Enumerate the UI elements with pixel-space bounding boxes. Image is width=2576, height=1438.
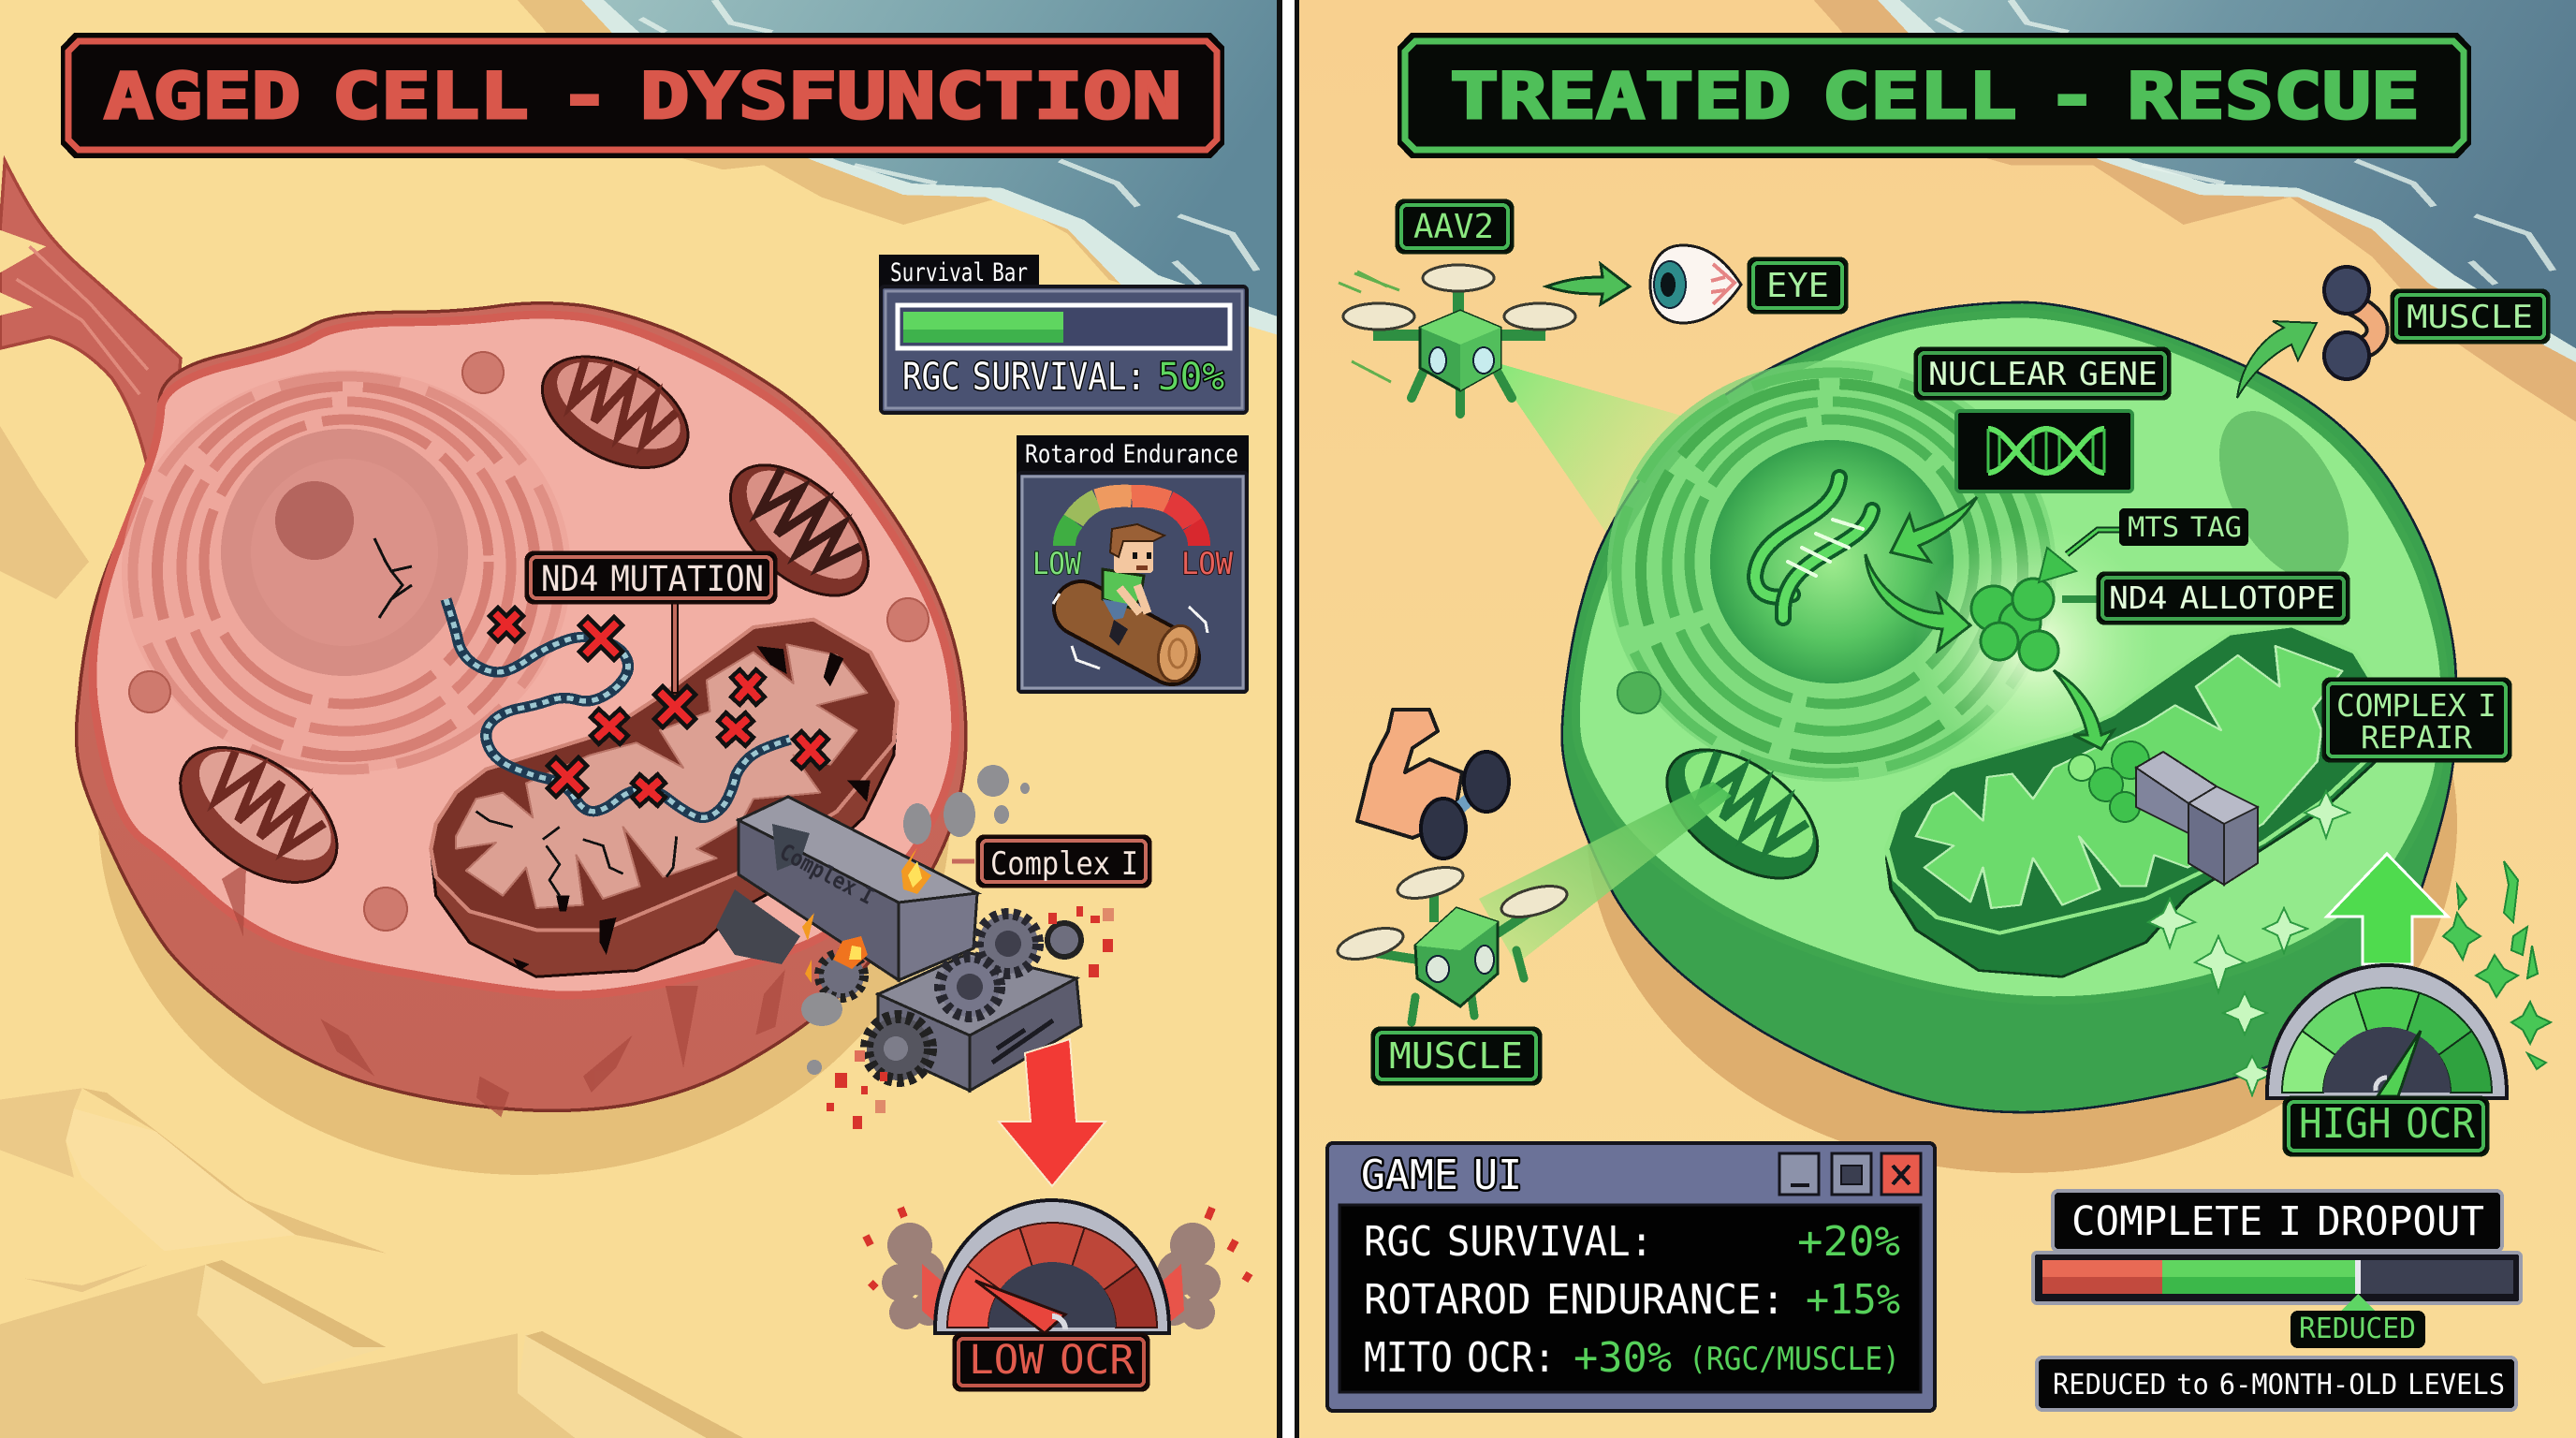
label: Complex I repair: COMPLEX I [2336, 687, 2496, 724]
arrow: drone to eye [1546, 264, 1630, 304]
cell body right [1562, 302, 2456, 1112]
sand shading upper left [0, 426, 89, 599]
panel: aged cell dysfunction [0, 0, 1278, 1438]
sea and shoreline right [1814, 0, 2576, 422]
panel: rotarod endurance [1017, 435, 1249, 692]
endoplasmic reticulum right [1607, 360, 2056, 782]
nucleus left [221, 429, 468, 676]
red X markers [498, 616, 820, 798]
panel: game UI: (RGC/MUSCLE) [1689, 1341, 1900, 1378]
gears [819, 914, 1081, 1080]
lower block [878, 953, 1076, 1035]
sparkles [2148, 791, 2349, 1095]
label: low OCR: LOW OCR [969, 1337, 1134, 1384]
DNA helix in nucleus [1755, 477, 1872, 618]
endurance arc gauge [1064, 496, 1199, 546]
label: AAV2: AAV2 [1413, 208, 1494, 246]
label: muscle upper [2392, 290, 2549, 343]
side wall blemishes [222, 862, 785, 1117]
mitochondrion lower left [156, 720, 361, 910]
panel: survival bar: Survival Bar [890, 258, 1028, 287]
panel: complete I dropout: COMPLETE I DROPOUT [2071, 1198, 2484, 1245]
glow ellipse cytoplasm [2192, 389, 2376, 603]
label: muscle lower: MUSCLE [1389, 1035, 1523, 1077]
panel: game UI [1327, 1143, 1935, 1411]
small mitochondria left [156, 334, 892, 910]
cell side wall right [1562, 302, 2456, 1112]
icon: DNA box [1956, 411, 2132, 492]
label: MTS tag: MTS TAG [2128, 511, 2242, 543]
label: ND4 mutation: ND4 MUTATION [541, 559, 764, 599]
arrow: protein to mitochondrion [2054, 670, 2114, 749]
panel: game UI: +30% [1573, 1334, 1672, 1382]
label: high OCR: HIGH OCR [2299, 1100, 2475, 1148]
panel: game UI: +20% [1797, 1218, 1900, 1266]
smoke behind gauge [866, 1208, 1250, 1329]
label: AAV2 [1397, 200, 1513, 253]
MTS tag triangle [2039, 548, 2076, 582]
title: treated cell: TREATED CELL - RESCUE [1450, 60, 2420, 134]
mitochondria cracks [513, 646, 871, 971]
arrow: down to low OCR [999, 1039, 1105, 1186]
nucleus right [1710, 440, 1954, 683]
protein glow [1914, 524, 2158, 768]
arrow: up to mitochondrion from gauge [2327, 854, 2448, 964]
gauge: high OCR [2267, 965, 2507, 1098]
endoplasmic reticulum left [122, 370, 571, 772]
panel: game UI: +15% [1806, 1276, 1900, 1324]
mitochondrion right [707, 440, 892, 620]
divider lines [1277, 0, 1299, 1438]
cell top surface [93, 315, 956, 995]
vesicle right [1617, 672, 1661, 713]
label: nuclear gene [1915, 348, 2170, 399]
label: ND4 allotope: ND4 ALLOTOPE [2109, 580, 2335, 616]
panel: complete I dropout: REDUCED [2299, 1313, 2416, 1345]
lower drone [1335, 861, 1570, 1022]
panel: game UI: ROTAROD ENDURANCE: [1364, 1276, 1785, 1324]
label: ND4 allotope [2062, 573, 2349, 624]
cell shadow [98, 454, 950, 1175]
arrow: nucleus to protein [1866, 554, 1970, 651]
window buttons [1779, 1153, 1921, 1195]
upper drone AAV2 [1339, 265, 1575, 414]
icon: dumbbell arm [2324, 267, 2378, 379]
label: eye [1749, 258, 1847, 313]
needle [975, 1281, 1065, 1333]
leader line [672, 599, 678, 693]
repaired Complex I block [2136, 752, 2258, 885]
title: treated cell [1398, 33, 2471, 158]
panel: complete I dropout: REDUCED to 6-MONTH-OLD LEVELS [2053, 1369, 2505, 1401]
label: Complex I: Complex I [990, 845, 1138, 883]
label: eye: EYE [1766, 267, 1829, 305]
label: muscle upper: MUSCLE [2407, 299, 2533, 336]
red debris [827, 906, 1114, 1129]
arrow: cell to muscle [2237, 321, 2317, 398]
gauge: low OCR [935, 1200, 1169, 1333]
panel: complete I dropout [2033, 1191, 2521, 1410]
title: aged cell [61, 33, 1224, 158]
panel: game UI: GAME UI [1361, 1152, 1522, 1199]
upper block [739, 797, 977, 902]
label: nuclear gene: NUCLEAR GENE [1928, 356, 2158, 393]
small mitochondrion right [1644, 724, 1840, 904]
sea and shoreline left [518, 0, 1278, 335]
broken Complex I machine [716, 765, 1114, 1129]
arrow: to nucleus [1891, 497, 1977, 562]
panel: game UI: MITO OCR: [1364, 1334, 1556, 1382]
label: Complex I repair [2323, 679, 2510, 761]
vesicles left [129, 352, 929, 931]
large mitochondrion left [431, 620, 897, 976]
smoke puffs [801, 765, 1030, 1075]
flames and sparks [802, 847, 931, 983]
title: aged cell: AGED CELL - DYSFUNCTION [104, 60, 1181, 134]
panel: game UI: RGC SURVIVAL: [1364, 1218, 1653, 1266]
label: MTS tag [2067, 508, 2248, 554]
panel: survival bar: RGC SURVIVAL: [902, 356, 1146, 399]
panel: rotarod endurance: LOW [1181, 546, 1234, 581]
broken Complex I machine: Complex I [775, 839, 878, 910]
ND4 allotope protein [1971, 579, 2058, 670]
panel: survival bar [879, 255, 1247, 413]
axon process [0, 161, 181, 468]
nuclear crack [374, 538, 412, 618]
mutated DNA strand [446, 599, 790, 817]
needle [2378, 1031, 2421, 1096]
icon: boy on rotating log [1053, 524, 1208, 685]
confetti sparkles right of arrow [2443, 861, 2551, 1069]
dunes and sand shading [0, 1088, 743, 1438]
panel: rotarod endurance: Rotarod Endurance [1025, 440, 1238, 469]
label: Complex I [952, 836, 1150, 887]
cell side wall [77, 303, 966, 1110]
beam from upper drone [1488, 360, 1685, 538]
repaired complex bound protein [2069, 741, 2149, 822]
large mitochondrion right [1887, 625, 2376, 976]
cell shadow right [1587, 475, 2457, 1173]
cell top surface right [1575, 314, 2444, 1001]
icon: flexed arm with dumbbell [1357, 710, 1509, 858]
panel: rotarod endurance: LOW [1032, 546, 1082, 581]
mitochondrion upper [524, 334, 707, 491]
icon: eye [1650, 245, 1741, 323]
panel: survival bar: 50% [1158, 356, 1224, 399]
label: muscle lower [1372, 1028, 1541, 1084]
panel: treated cell rescue [1299, 0, 2576, 1438]
label: low OCR [954, 1334, 1149, 1390]
dropout bar [2033, 1253, 2521, 1303]
arrow: green beam to muscle cell [1479, 782, 1732, 964]
cell body [77, 303, 966, 1117]
sand background right [1299, 0, 2576, 1438]
label: Complex I repair: REPAIR [2361, 719, 2472, 756]
sand background left [0, 0, 1277, 1438]
